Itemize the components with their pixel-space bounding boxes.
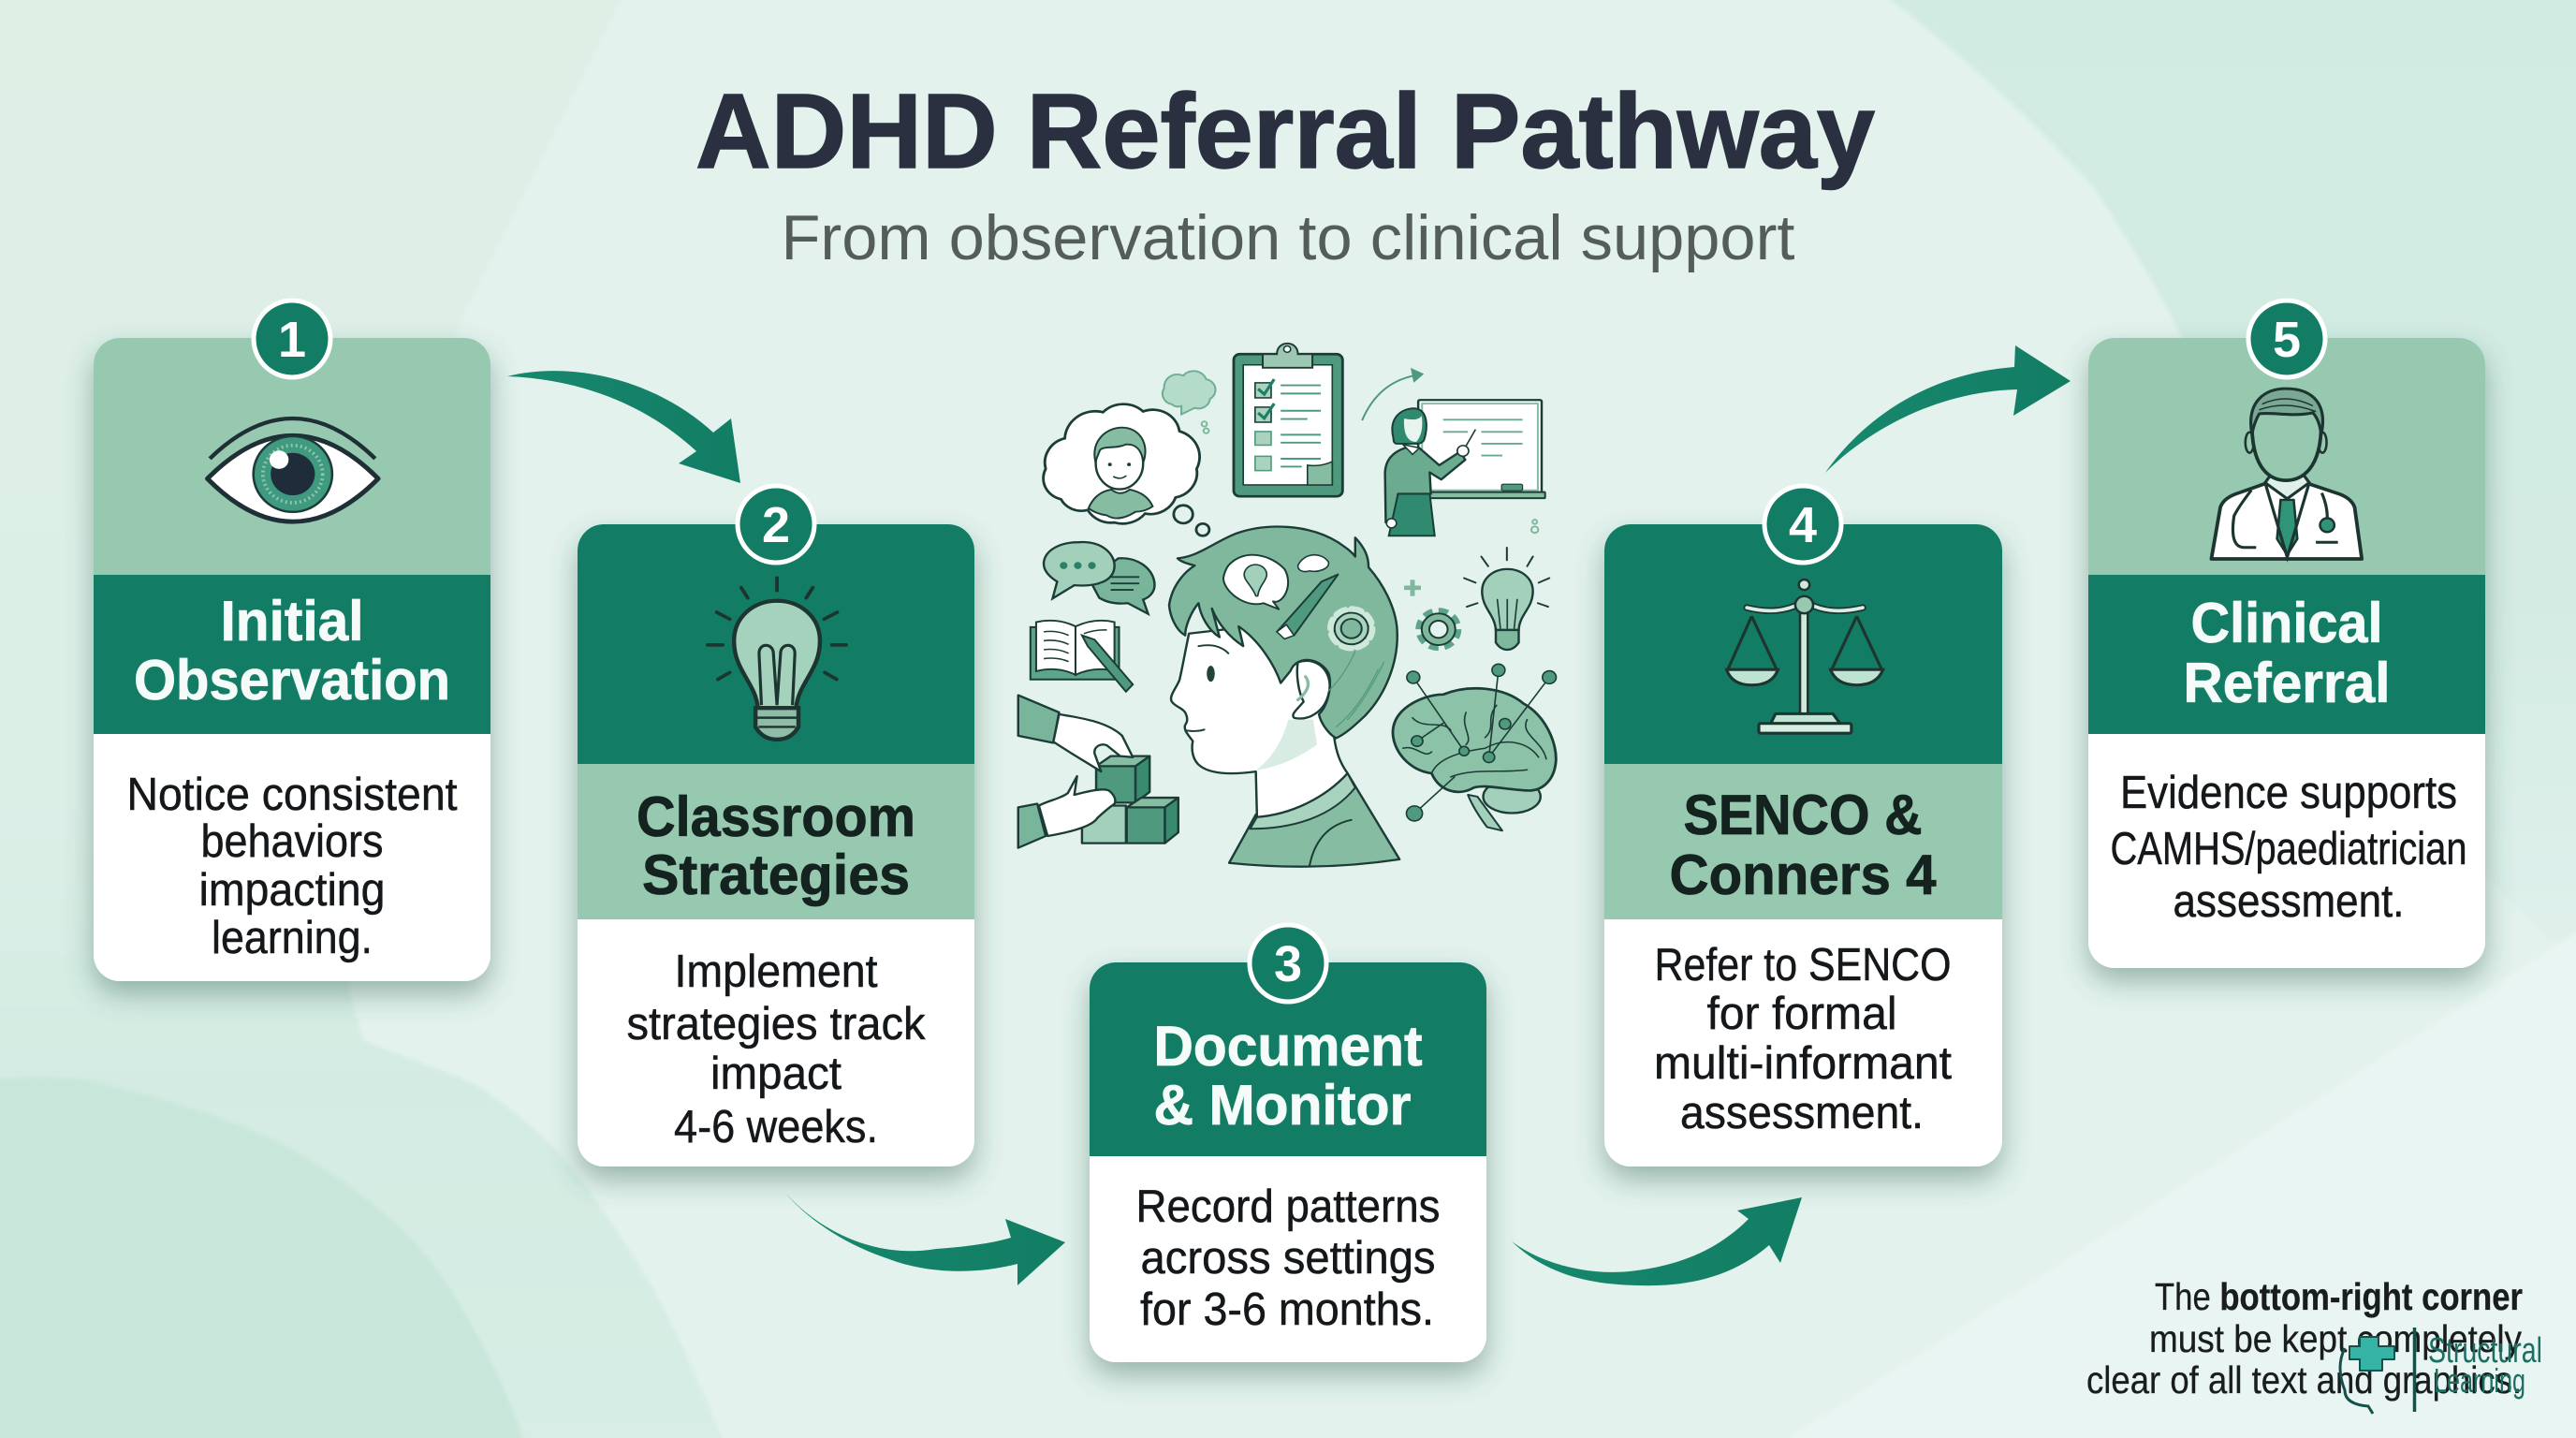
panel: step 4 SENCO and Conners 4 [1604,486,2002,1167]
heading [2183,592,2391,714]
body text: behaviors [200,816,384,867]
icon: lightbulb [708,578,846,740]
body text: for formal [1707,989,1896,1039]
number badge 1: 1 [278,312,306,368]
number badge 3: 3 [1274,936,1302,992]
heading: Conners 4 [1670,844,1937,906]
heading: & Monitor [1153,1074,1412,1137]
heading: Initial [221,590,363,653]
body text [2110,768,2467,927]
heading [134,590,450,712]
body text: multi-informant [1654,1038,1952,1089]
icon: eye [208,418,378,521]
central illustration: child and support themes [1018,344,1557,867]
panel: step 5 clinical referral [2088,301,2485,968]
heading: Observation [134,649,450,712]
heading: Clinical [2190,592,2383,654]
heading: Document [1153,1015,1423,1078]
body text: Implement [674,946,878,997]
body text: Refer to SENCO [1655,940,1951,990]
icon: lightbulb small [1464,548,1549,650]
number badge 4: 4 [1789,497,1817,553]
body text: assessment. [2174,876,2404,927]
arrow: step 3 to step 4 [1512,1197,1802,1285]
body text: across settings [1140,1233,1436,1284]
body text: strategies track [627,999,926,1049]
body text: 4-6 weeks. [674,1102,878,1152]
body text: impacting [198,865,386,916]
number badge 2 [738,486,814,563]
icon: open book and pencil [1031,621,1133,692]
body text: Evidence supports [2120,768,2457,818]
icon: small green thought cloud [1163,371,1216,415]
watermark logo: Structural Learning [2340,1328,2542,1414]
body text: assessment. [1680,1088,1924,1138]
arrow: step 4 to step 5 [1825,345,2071,473]
panel: step 1 initial observation [94,301,490,981]
heading: Classroom [637,785,915,848]
note: bottom-right corner text: The bottom-right corner [2155,1275,2523,1318]
note: bottom-right corner text: must be kept completely [2149,1317,2522,1360]
body text: learning. [212,913,373,963]
title: ADHD Referral Pathway [695,72,1875,190]
number badge 3 [1250,925,1326,1002]
arrow: step 1 to step 2 [507,371,740,483]
heading [637,785,915,906]
icon: brain with network nodes [1393,664,1557,830]
heading: SENCO & [1683,784,1923,846]
body text [127,770,458,963]
number badge 4 [1764,486,1841,563]
icon: doctor [2211,389,2362,559]
body text: Record patterns [1136,1181,1440,1232]
icon: teacher at whiteboard [1362,368,1545,536]
heading: Strategies [642,844,910,906]
subtitle: From observation to clinical support [781,202,1795,273]
number badge 1 [254,301,330,377]
watermark logo: Structural Learning: Learning [2434,1361,2525,1400]
number badge 5 [2248,301,2325,377]
icon: thought dots [1174,506,1209,536]
heading [1153,1015,1423,1137]
icon: hands and building blocks [1018,696,1178,848]
number badge 2: 2 [762,497,790,553]
panel: step 2 classroom strategies [578,486,974,1167]
note: bottom-right corner text: clear of all text and graphics. [2086,1358,2522,1401]
arrow: step 2 to step 3 [784,1192,1065,1285]
body text: CAMHS/paediatrician [2110,824,2467,874]
body text: Notice consistent [127,770,458,820]
icon: balance scales [1727,580,1883,733]
note: bottom-right corner text [2086,1275,2523,1401]
icon: speech bubbles [1044,542,1154,614]
icon: sparkle and bubbles [1202,421,1538,596]
illustration: child profile [1169,527,1399,867]
body text: for 3-6 months. [1140,1284,1434,1335]
body text [1654,940,1952,1138]
number badge 5: 5 [2273,312,2301,368]
watermark logo: Structural Learning: Structural [2428,1331,2542,1371]
panel: step 3 document and monitor [1090,925,1486,1362]
body text [1136,1181,1440,1335]
heading: Referral [2183,652,2391,714]
icon: clipboard checklist [1234,344,1342,496]
icon: thought bubble with child [1044,404,1200,523]
icon: gear [1419,610,1458,648]
heading [1670,784,1937,906]
body text: impact [710,1049,842,1099]
body text [627,946,926,1152]
